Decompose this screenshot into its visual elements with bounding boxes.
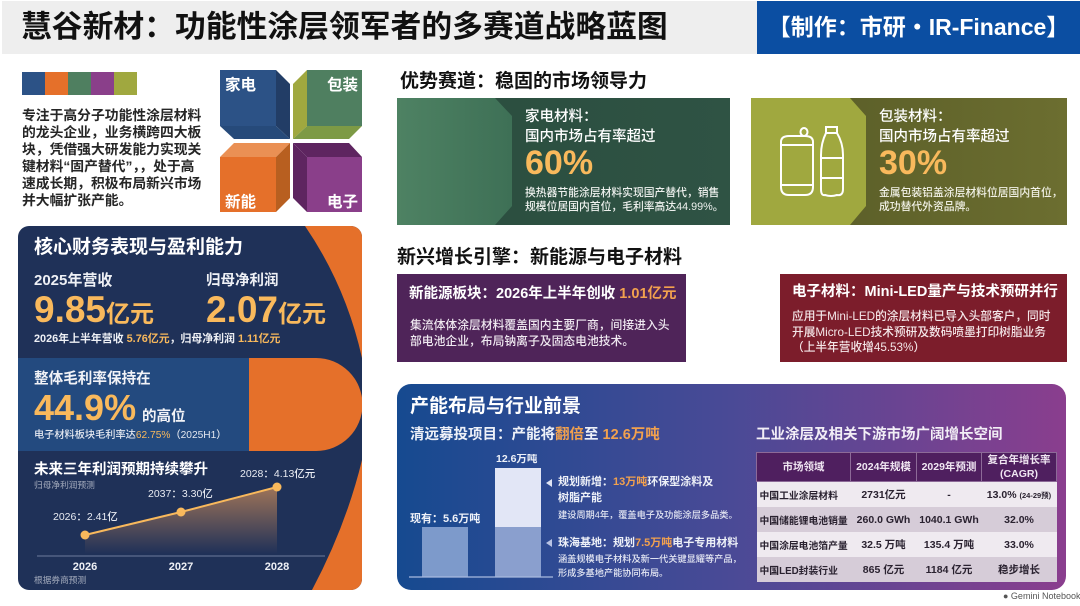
note detail: 建设周期4年，覆盖电子及功能涂层多品类。 bbox=[558, 510, 738, 520]
panel: electronic materials bbox=[780, 274, 1067, 362]
cube: new energy: 新能 bbox=[225, 192, 257, 211]
note: Zhuhai base bbox=[546, 536, 742, 578]
panel: new energy bbox=[397, 274, 686, 362]
note detail bbox=[558, 554, 742, 578]
share value: 30% bbox=[879, 144, 947, 182]
arrow bbox=[546, 539, 552, 547]
card description: 应用于Mini-LED的涂层材料已导入头部客户，同时 bbox=[792, 310, 1050, 323]
heading: emerging growth: 新兴增长引擎：新能源与电子材料 bbox=[397, 247, 682, 268]
card heading: 家电材料： bbox=[525, 109, 598, 125]
market table: 32.0% bbox=[1004, 514, 1034, 526]
card description bbox=[792, 310, 1050, 354]
company intro text: 速成长期，积极布局新兴市场 bbox=[22, 176, 201, 191]
forecast heading: 未来三年利润预期持续攀升 bbox=[34, 462, 208, 478]
card description: 规模位居国内首位，毛利率高达44.99%。 bbox=[525, 201, 724, 213]
electronics margin: 电子材料板块毛利率达62.75%（2025H1） bbox=[34, 430, 226, 441]
project headline: 清远募投项目：产能将翻倍至 12.6万吨 bbox=[410, 427, 660, 443]
forecast subheading: 归母净利润预测 bbox=[34, 480, 95, 490]
header bar bbox=[2, 1, 1080, 54]
gross margin band bbox=[18, 358, 362, 451]
market table: 复合年增长率 bbox=[988, 454, 1050, 466]
card heading: 包装材料： bbox=[879, 109, 952, 125]
market table: 135.4 万吨 bbox=[924, 539, 974, 551]
four business cubes bbox=[220, 70, 362, 212]
line chart: 2028：4.13亿元 bbox=[240, 467, 316, 480]
note heading bbox=[558, 476, 713, 504]
line chart bbox=[37, 467, 325, 573]
market table: 2024年规模 bbox=[856, 461, 911, 473]
producer badge bbox=[757, 1, 1080, 54]
panel: home appliance materials bbox=[397, 98, 730, 225]
producer badge: 【制作：市研・IR-Finance】 bbox=[768, 14, 1069, 40]
company intro text bbox=[22, 108, 201, 208]
note: planned capacity bbox=[546, 476, 738, 520]
card description: 集流体体涂层材料覆盖国内主要厂商，间接进入头 bbox=[410, 318, 670, 332]
half-year summary: 2026年上半年营收 5.76亿元，归母净利润 1.11亿元 bbox=[34, 333, 280, 345]
company intro text: 键材料“固产替代”，，处于高 bbox=[22, 159, 194, 174]
cube: electronics bbox=[293, 143, 362, 212]
chevron bbox=[397, 98, 512, 225]
card heading: 新能源板块：2026年上半年创收 1.01亿元 bbox=[409, 286, 677, 302]
card description: 部电池企业，布局钠离子及固态电池技术。 bbox=[410, 334, 634, 348]
margin label: 整体毛利率保持在 bbox=[34, 371, 151, 387]
profit label: 归母净利润 bbox=[206, 273, 278, 289]
colour strip bbox=[22, 72, 137, 95]
cube: new energy bbox=[220, 143, 290, 212]
market table: 稳步增长 bbox=[998, 564, 1040, 576]
company intro text: 的龙头企业，业务横跨四大板 bbox=[22, 125, 201, 140]
market table: 2029年预测 bbox=[922, 461, 976, 473]
market heading: 工业涂层及相关下游市场广阔增长空间 bbox=[756, 427, 1002, 443]
heading: 产能布局与行业前景 bbox=[410, 396, 581, 417]
market table: - bbox=[947, 488, 951, 500]
card description: （上半年营收增45.53%） bbox=[792, 341, 925, 354]
cube: home appliances bbox=[220, 70, 290, 139]
line chart: 2027 bbox=[169, 561, 193, 573]
heading: advantage tracks: 优势赛道：稳固的市场领导力 bbox=[400, 71, 647, 92]
title: 慧谷新材：功能性涂层领军者的多赛道战略蓝图 bbox=[21, 9, 668, 44]
market table: 中国储能锂电池销量 bbox=[760, 516, 848, 526]
note detail: 涵盖规模电子材料及新一代关键显耀等产品， bbox=[558, 554, 742, 564]
card description bbox=[410, 318, 670, 348]
market table: 1040.1 GWh bbox=[919, 514, 979, 526]
market table: 中国涂层电池箔产量 bbox=[760, 540, 848, 552]
icon: can and bottle bbox=[780, 126, 844, 197]
market table: 2731亿元 bbox=[861, 489, 906, 501]
line chart: 2037：3.30亿 bbox=[148, 487, 213, 500]
company intro text: 专注于高分子功能性涂层材料 bbox=[22, 108, 201, 123]
market table: 260.0 GWh bbox=[857, 514, 910, 526]
market table: 市场领域 bbox=[782, 461, 824, 473]
profit value: 2.07亿元 bbox=[206, 289, 326, 330]
note heading: 规划新增：13万吨环保型涂料及 bbox=[558, 476, 713, 488]
cube: electronics: 电子 bbox=[327, 193, 358, 211]
note detail: 形成多基地产能协同布局。 bbox=[558, 568, 668, 578]
cube: home appliances: 家电 bbox=[225, 75, 257, 94]
arrow bbox=[546, 479, 552, 487]
source note: 根据券商预测 bbox=[34, 575, 86, 585]
line chart: 2026：2.41亿 bbox=[53, 510, 118, 523]
note heading: 珠海基地：规划7.5万吨电子专用材料 bbox=[558, 537, 738, 549]
heading: 核心财务表现与盈利能力 bbox=[34, 237, 243, 258]
watermark: ● Gemini Notebook bbox=[1003, 591, 1080, 601]
market table bbox=[756, 452, 1057, 582]
band background bbox=[18, 358, 362, 451]
card subheading: 国内市场占有率超过 bbox=[879, 129, 1010, 145]
market table: 33.0% bbox=[1004, 538, 1034, 550]
card subheading: 国内市场占有率超过 bbox=[525, 129, 656, 145]
market table: 中国工业涂层材料 bbox=[760, 490, 838, 502]
card description: 开展Micro-LED技术预研及数码喷墨打印树脂业务 bbox=[792, 326, 1046, 338]
share value: 60% bbox=[525, 144, 593, 182]
market table: 中国LED封装行业 bbox=[760, 566, 838, 576]
market table: 1184 亿元 bbox=[926, 564, 972, 576]
cube: packaging bbox=[293, 70, 362, 139]
card description: 金属包装铝盖涂层材料位居国内首位， bbox=[879, 187, 1063, 199]
panel: core financials bbox=[18, 226, 362, 590]
note heading: 树脂产能 bbox=[558, 492, 602, 504]
line chart: 2026 bbox=[73, 561, 97, 573]
margin suffix: 的高位 bbox=[142, 409, 186, 425]
panel: packaging materials bbox=[751, 98, 1067, 225]
revenue label: 2025年营收 bbox=[34, 272, 112, 289]
market table: 865 亿元 bbox=[863, 564, 904, 576]
capacity bar chart bbox=[409, 454, 553, 578]
card description bbox=[525, 186, 724, 213]
company intro text: 块，凭借强大研发能力实现关 bbox=[22, 142, 201, 157]
card description: 成功替代外资品牌。 bbox=[879, 201, 976, 213]
card description: 换热器节能涂层材料实现国产替代，销售 bbox=[525, 187, 719, 199]
orange corner shapes bbox=[305, 226, 362, 590]
margin value: 44.9% bbox=[34, 387, 136, 428]
line chart: 2028 bbox=[265, 561, 289, 573]
panel: capacity and outlook bbox=[397, 384, 1066, 590]
market table: 32.5 万吨 bbox=[861, 539, 906, 551]
card description bbox=[879, 186, 1063, 213]
market table: 13.0% (24-29预) bbox=[987, 488, 1051, 500]
market table: (CAGR) bbox=[1000, 468, 1038, 480]
company intro text: 并大幅扩张产能。 bbox=[22, 193, 132, 208]
cube: packaging: 包装 bbox=[327, 75, 359, 94]
capacity bar chart: 现有：5.6万吨 bbox=[410, 511, 480, 525]
card heading: 电子材料：Mini-LED量产与技术预研并行 bbox=[792, 284, 1058, 300]
revenue value: 9.85亿元 bbox=[34, 289, 154, 330]
chevron bbox=[751, 98, 866, 225]
